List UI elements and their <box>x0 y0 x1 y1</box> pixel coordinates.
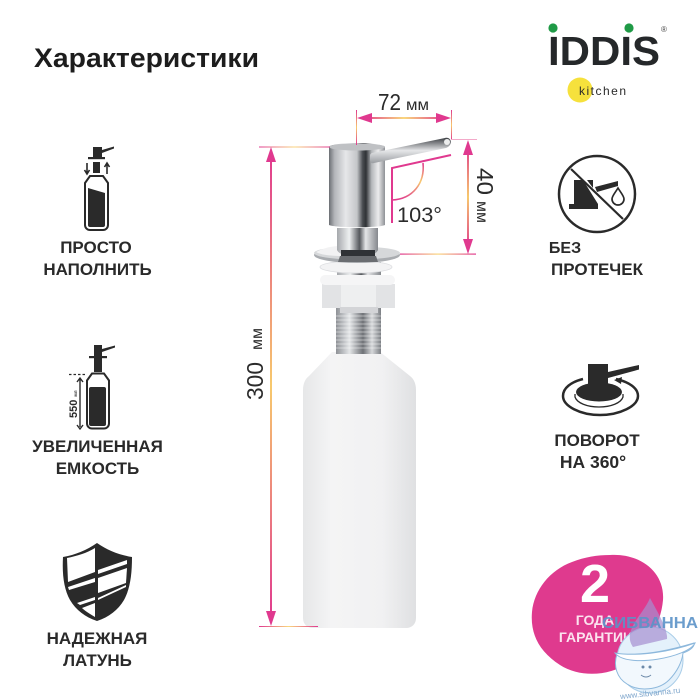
stem <box>337 228 378 256</box>
label: brass: ЛАТУНЬ <box>63 651 132 670</box>
icon: refill bottle <box>84 146 114 230</box>
dimension: 300 mm: 300 <box>242 362 268 400</box>
watermark: Sibvanna: СИБВАННА <box>602 615 698 632</box>
watermark: Sibvanna <box>602 598 698 700</box>
icon: shield <box>63 543 132 621</box>
label: capacity: УВЕЛИЧЕННАЯ <box>32 437 163 456</box>
dimension: 300 mm <box>242 146 330 627</box>
title: Характеристики <box>34 43 259 73</box>
label: rotation 360: НА 360° <box>560 452 626 472</box>
dimension: 103 degree angle: 103° <box>397 204 442 227</box>
label: brass: НАДЕЖНАЯ <box>47 629 147 648</box>
icon: rotation 360 <box>563 364 639 415</box>
dimension: 40 mm: мм <box>473 201 490 223</box>
spout <box>370 138 451 163</box>
dimension: 300 mm: мм <box>249 328 266 350</box>
warranty badge: 2 <box>580 554 610 614</box>
icon: 550 ml bottle <box>68 345 115 429</box>
pump head <box>329 143 385 227</box>
logo: IDDIS kitchen <box>548 23 667 102</box>
plastic nut <box>320 275 395 313</box>
label: no leaks: БЕЗ <box>549 240 581 257</box>
logo: IDDIS kitchen: ® <box>661 25 667 34</box>
dimension: 40 mm: 40 <box>472 168 498 195</box>
dimension: 72 mm <box>356 89 452 145</box>
logo: IDDIS kitchen: kitchen <box>579 84 628 98</box>
warranty badge: ГАРАНТИИ <box>559 629 633 645</box>
icon: no leaks <box>559 156 635 232</box>
warranty badge <box>532 554 663 674</box>
product photo: dispenser <box>303 138 451 628</box>
dimension: 40 mm <box>400 139 498 255</box>
label: capacity: ЕМКОСТЬ <box>56 459 139 478</box>
warranty badge: ГОДА <box>576 612 614 628</box>
label: refill: ПРОСТО <box>60 238 132 257</box>
icon: 550 ml bottle: 550 мл <box>68 390 80 418</box>
threaded collar <box>337 262 381 278</box>
label: rotation: ПОВОРОТ <box>554 431 640 450</box>
label: refill: НАПОЛНИТЬ <box>43 260 152 279</box>
label: no leaks second line: ПРОТЕЧЕК <box>551 260 644 279</box>
white washer <box>320 261 392 273</box>
dimension: 72 mm: мм <box>406 97 429 114</box>
dimension: 103 degree angle <box>392 155 451 227</box>
logo: IDDIS kitchen: IDDIS <box>548 28 660 74</box>
threaded neck <box>336 308 381 354</box>
bottle body <box>303 352 416 628</box>
dimension: 72 mm: 72 <box>378 89 401 115</box>
flange <box>314 247 400 263</box>
